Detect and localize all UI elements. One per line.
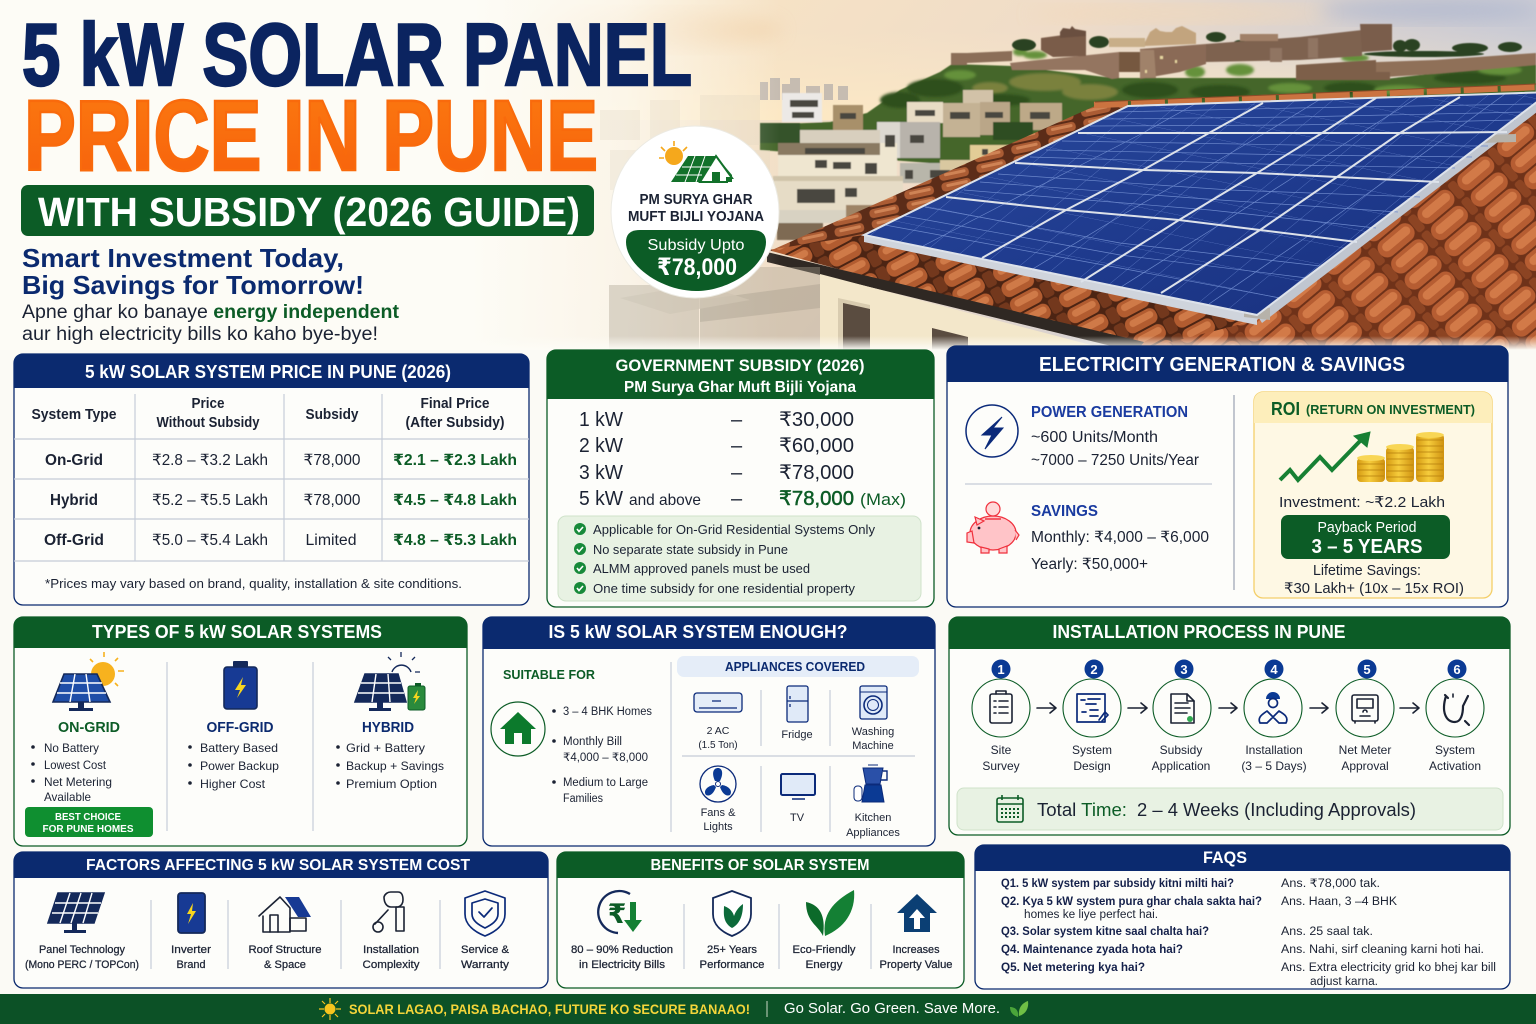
roof <box>774 106 1124 250</box>
heading: subsidy <box>616 356 864 396</box>
subsidy badge <box>611 126 779 298</box>
footer banner <box>0 994 1536 1024</box>
suitable for column: 3 – 4 BHK Homes <box>563 706 652 718</box>
lower walls <box>951 51 1012 65</box>
subsidy rates list: – <box>731 435 743 457</box>
benefit: performance: 25+ Years <box>707 944 757 956</box>
appliance: air conditioner <box>694 693 742 751</box>
panel: FAQs <box>975 845 1510 989</box>
table row: off-grid <box>44 532 517 549</box>
step 4: installation: 4 <box>1270 662 1278 677</box>
appliance: air conditioner: 2 AC <box>707 725 730 737</box>
step 1: site survey: 1 <box>997 662 1005 677</box>
heading: installation: INSTALLATION PROCESS IN PUNE <box>1052 622 1346 642</box>
heading: price table: 5 kW SOLAR SYSTEM PRICE IN PUNE (2026) <box>85 362 451 382</box>
benefit: bill reduction <box>571 891 673 971</box>
table row: on-grid: ₹2.1 – ₹2.3 Lakh <box>393 452 517 469</box>
best choice badge: FOR PUNE HOMES <box>42 823 134 835</box>
appliance: kitchen mixer: Kitchen <box>855 812 891 824</box>
ROI card: Lifetime Savings: <box>1313 563 1421 579</box>
total time bar: 2 – 4 Weeks (Including Approvals) <box>1137 800 1416 820</box>
table row: off-grid: Limited <box>306 532 356 549</box>
question 5: adjust karna. <box>1310 976 1378 988</box>
benefit: bill reduction: 80 – 90% Reduction <box>571 944 673 956</box>
subsidy rates list <box>579 409 906 510</box>
table header row: (After Subsidy) <box>406 415 505 431</box>
appliance: TV <box>781 774 815 824</box>
appliance: fan <box>700 766 736 833</box>
power generation text: ~7000 – 7250 Units/Year <box>1031 452 1199 469</box>
benefit: property value: Increases <box>892 944 940 956</box>
subsidy rates list: – <box>731 462 743 484</box>
question 1: Q1. 5 kW system par subsidy kitni milti hai? <box>1001 878 1234 890</box>
step 1: site survey: Site <box>991 743 1012 757</box>
icon: lightning bolt <box>966 405 1018 457</box>
arrow <box>1219 703 1237 713</box>
subsidy conditions box <box>558 516 921 601</box>
table row: hybrid <box>50 492 517 509</box>
step 4: installation: Installation <box>1245 743 1303 757</box>
factor: roof structure <box>248 897 322 971</box>
factor: service and warranty: Service & <box>461 944 510 956</box>
icon: sun <box>319 998 341 1020</box>
subsidy conditions box: No separate state subsidy in Pune <box>593 542 788 557</box>
heading: electricity: ELECTRICITY GENERATION & SAVINGS <box>1039 354 1405 376</box>
subsidy conditions box: ALMM approved panels must be used <box>593 561 810 576</box>
suitable for column: SUITABLE FOR <box>503 668 595 682</box>
icon: on-grid panel and sun <box>53 652 124 711</box>
table header row: Subsidy <box>306 407 358 423</box>
appliance: kitchen mixer <box>846 765 900 839</box>
table row: hybrid: ₹78,000 <box>304 492 361 509</box>
factor: inverter: Inverter <box>171 944 211 956</box>
step 3: subsidy application: Subsidy <box>1160 743 1202 757</box>
off-grid column: Higher Cost <box>200 777 266 791</box>
appliance: fridge <box>781 686 813 741</box>
total time bar <box>957 788 1503 830</box>
benefit: property value <box>880 894 952 971</box>
table row: on-grid: ₹2.8 – ₹3.2 Lakh <box>152 452 268 469</box>
power generation text: ~600 Units/Month <box>1031 429 1158 446</box>
factor: inverter <box>171 893 211 971</box>
question 5: Q5. Net metering kya hai? <box>1001 962 1145 974</box>
subsidy conditions box: One time subsidy for one residential property <box>593 581 856 596</box>
question 3: Q3. Solar system kitne saal chalta hai? <box>1001 926 1209 938</box>
question 3: Ans. 25 saal tak. <box>1281 926 1373 938</box>
panel: benefits <box>557 852 964 988</box>
arrow <box>1310 703 1328 713</box>
appliance: TV: TV <box>790 812 805 824</box>
subsidy rates list: (Max) <box>860 490 906 509</box>
subsidy badge: MUFT BIJLI YOJANA <box>628 208 764 225</box>
question 4 <box>1001 944 1484 956</box>
factor: service and warranty: Warranty <box>461 959 510 971</box>
step 2: system design: 2 <box>1090 662 1098 677</box>
off-grid column <box>188 720 279 791</box>
factor: roof structure: & Space <box>264 959 306 971</box>
subsidy rates list: 1 kW <box>579 409 623 431</box>
appliance: washing machine: Washing <box>852 726 894 738</box>
table row: on-grid: ₹78,000 <box>304 452 361 469</box>
icon: coin stacks <box>1357 432 1444 482</box>
table row: on-grid <box>45 452 517 469</box>
subsidy rates list: ₹60,000 <box>779 435 854 457</box>
footnote: *Prices may vary based on brand, quality, installation & site conditions. <box>45 577 462 591</box>
savings text: Yearly: ₹50,000+ <box>1031 556 1148 573</box>
question 4: Q4. Maintenance zyada hota hai? <box>1001 944 1183 956</box>
factor: roof structure: Roof Structure <box>248 944 322 956</box>
step 2: system design: System <box>1072 743 1112 757</box>
off-grid column: Power Backup <box>200 759 279 773</box>
title line 2: PRICE IN PUNE <box>24 80 598 192</box>
table row: hybrid: ₹5.2 – ₹5.5 Lakh <box>152 492 268 509</box>
best choice badge <box>25 807 153 837</box>
panel: factors affecting cost <box>14 852 548 988</box>
intro text <box>22 302 400 345</box>
tagline <box>22 243 364 300</box>
footer banner: SOLAR LAGAO, PAISA BACHAO, FUTURE KO SECURE BANAAO! <box>349 1002 750 1017</box>
heading: subsidy: GOVERNMENT SUBSIDY (2026) <box>616 356 864 375</box>
appliance: air conditioner: (1.5 Ton) <box>698 740 738 751</box>
subsidy rates list: and above <box>629 492 701 509</box>
payback badge: 3 – 5 YEARS <box>1312 536 1422 558</box>
benefit: performance <box>700 891 764 971</box>
intro text: aur high electricity bills ko kaho bye-bye! <box>22 324 378 345</box>
payback badge <box>1281 515 1450 559</box>
table row: off-grid: Off-Grid <box>44 532 104 549</box>
subsidy rates list: – <box>731 409 743 431</box>
arrow <box>1128 703 1147 713</box>
chart: growth arrow <box>1280 432 1370 480</box>
benefit: eco-friendly: Eco-Friendly <box>792 944 856 956</box>
step 6: system activation: 6 <box>1453 662 1461 677</box>
step 2: system design <box>1063 660 1121 773</box>
panel: electricity generation and savings <box>947 346 1508 607</box>
step 5: net meter: Net Meter <box>1339 743 1391 757</box>
factor: panel technology: (Mono PERC / TOPCon) <box>25 959 139 971</box>
ridge-side buildings <box>782 93 822 122</box>
table row: off-grid: ₹5.0 – ₹5.4 Lakh <box>152 532 268 549</box>
ROI card: Investment: ~₹2.2 Lakh <box>1279 494 1445 511</box>
power generation text <box>1031 404 1199 469</box>
appliances heading pill: APPLIANCES COVERED <box>725 660 865 674</box>
step 5: net meter: Approval <box>1341 759 1389 773</box>
icon: home <box>491 702 545 756</box>
off-grid column: Battery Based <box>200 741 278 755</box>
subsidy rates list: 3 kW <box>579 462 623 484</box>
appliance: washing machine: Machine <box>852 740 894 752</box>
on-grid column: Net Metering <box>44 775 112 789</box>
table header row: Without Subsidy <box>156 415 260 431</box>
question 4: Ans. Nahi, sirf cleaning karni hoti hai. <box>1281 944 1484 956</box>
subsidy badge: ₹78,000 <box>657 254 737 281</box>
hybrid column: Grid + Battery <box>346 741 425 755</box>
table row: on-grid: On-Grid <box>45 452 103 469</box>
heading: factors: FACTORS AFFECTING 5 kW SOLAR SYSTEM COST <box>86 857 471 874</box>
on-grid column: Lowest Cost <box>44 758 107 772</box>
table row: hybrid: ₹4.5 – ₹4.8 Lakh <box>393 492 517 509</box>
question 1: Ans. ₹78,000 tak. <box>1281 878 1380 890</box>
subsidy conditions box: Applicable for On-Grid Residential Systems Only <box>593 522 875 537</box>
appliances heading pill <box>677 656 919 677</box>
appliance: kitchen mixer: Appliances <box>846 827 900 839</box>
icon: leaf <box>1010 1001 1028 1017</box>
step 6: system activation <box>1426 660 1484 773</box>
question 5: Ans. Extra electricity grid ko bhej kar bill <box>1281 962 1496 974</box>
subsidy rates list: – <box>731 488 743 510</box>
panel: price table <box>14 354 529 605</box>
heading: benefits: BENEFITS OF SOLAR SYSTEM <box>650 857 870 874</box>
suitable for column: ₹4,000 – ₹8,000 <box>563 752 648 764</box>
question 2: homes ke liye perfect hai. <box>1024 909 1158 921</box>
step 4: installation: (3 – 5 Days) <box>1241 759 1307 773</box>
heading: FAQs: FAQS <box>1203 849 1247 867</box>
heading: subsidy: PM Surya Ghar Muft Bijli Yojana <box>624 379 856 396</box>
question 3 <box>1001 926 1373 938</box>
ROI heading: (RETURN ON INVESTMENT) <box>1306 402 1475 417</box>
subtitle banner: WITH SUBSIDY (2026 GUIDE) <box>38 189 580 235</box>
ROI card: ₹30 Lakh+ (10x – 15x ROI) <box>1284 581 1464 597</box>
heading: types: TYPES OF 5 kW SOLAR SYSTEMS <box>92 622 382 642</box>
question 2: Q2. Kya 5 kW system pura ghar chala sakta hai? <box>1001 896 1262 908</box>
panel: installation process <box>949 617 1510 835</box>
panel: is 5 kW enough <box>483 617 935 846</box>
question 2 <box>1001 896 1397 921</box>
question 1 <box>1001 878 1380 890</box>
benefit: bill reduction: in Electricity Bills <box>579 959 666 971</box>
appliance: fridge: Fridge <box>781 729 813 741</box>
factor: inverter: Brand <box>176 959 206 971</box>
on-grid column: ON-GRID <box>58 720 120 736</box>
step 1: site survey: Survey <box>982 759 1020 773</box>
left fade and faded foreground buildings <box>0 0 780 350</box>
savings text: SAVINGS <box>1031 503 1098 520</box>
subsidy badge: Subsidy Upto <box>648 237 745 254</box>
ROI heading: ROI <box>1271 399 1300 419</box>
table header row: Price <box>192 396 224 412</box>
icon: piggy bank <box>967 502 1019 553</box>
savings text: Monthly: ₹4,000 – ₹6,000 <box>1031 529 1209 546</box>
factor: service and warranty <box>461 891 510 971</box>
subsidy rates list: ₹78,000 <box>779 462 854 484</box>
table header row: System Type <box>32 407 116 423</box>
appliance: washing machine <box>852 686 894 752</box>
step 3: subsidy application: Application <box>1152 759 1210 773</box>
off-grid column: OFF-GRID <box>206 720 274 736</box>
question 2: Ans. Haan, 3 –4 BHK <box>1281 896 1397 908</box>
subsidy rates list: ₹78,000 <box>779 488 854 510</box>
suitable for column: Families <box>563 793 603 805</box>
on-grid column: Available <box>44 790 91 804</box>
on-grid column <box>31 720 120 804</box>
benefit: property value: Property Value <box>880 959 952 971</box>
step 5: net meter: 5 <box>1363 662 1371 677</box>
on-grid column: No Battery <box>44 741 99 755</box>
arrow <box>1037 703 1056 713</box>
benefit: eco-friendly <box>792 890 856 971</box>
step 2: system design: Design <box>1073 759 1111 773</box>
icon: battery <box>224 661 257 709</box>
ROI card <box>1254 392 1492 598</box>
suitable for column: Monthly Bill <box>563 736 622 748</box>
step 4: installation <box>1241 660 1307 773</box>
subsidy badge: PM SURYA GHAR <box>640 191 753 208</box>
ROI heading <box>1271 399 1475 419</box>
step 1: site survey <box>972 660 1030 773</box>
hybrid column: Backup + Savings <box>346 759 444 773</box>
benefit: bill reduction: ₹ <box>608 899 626 929</box>
step 5: net meter <box>1336 660 1394 773</box>
power generation text: POWER GENERATION <box>1031 404 1188 421</box>
icon: calendar <box>997 795 1023 822</box>
table row: hybrid: Hybrid <box>50 492 98 509</box>
hero photo: hillside fort, city and rooftop solar array <box>547 0 1536 350</box>
step 6: system activation: Activation <box>1429 759 1481 773</box>
subsidy rates list: 2 kW <box>579 435 623 457</box>
hybrid column <box>336 720 444 791</box>
hybrid column: Premium Option <box>346 777 437 791</box>
intro text: Apne ghar ko banaye energy independent <box>22 302 400 323</box>
best choice badge: BEST CHOICE <box>55 811 121 823</box>
savings text <box>1031 503 1209 573</box>
appliance: fan: Lights <box>703 821 733 833</box>
question 5 <box>1001 962 1496 988</box>
tagline: Big Savings for Tomorrow! <box>22 270 364 300</box>
subsidy rates list: ₹30,000 <box>779 409 854 431</box>
icon: hybrid panel, sun and battery <box>355 652 425 711</box>
factor: panel technology: Panel Technology <box>39 944 125 956</box>
arrow <box>1400 703 1419 713</box>
icon: sun and solar house <box>659 141 732 182</box>
subsidy rates list: 5 kW <box>579 488 623 510</box>
upper fort <box>1041 32 1086 57</box>
panel: types of systems <box>14 617 467 846</box>
heading: is 5 kW enough: IS 5 kW SOLAR SYSTEM ENOUGH? <box>548 622 848 642</box>
hybrid column: HYBRID <box>362 720 414 736</box>
table row: off-grid: ₹4.8 – ₹5.3 Lakh <box>393 532 517 549</box>
table header row: Final Price <box>420 396 490 412</box>
step 6: system activation: System <box>1435 743 1475 757</box>
factor: panel technology <box>25 893 139 971</box>
factor: installation complexity: Complexity <box>362 959 420 971</box>
panel: government subsidy <box>547 350 934 607</box>
factor: installation complexity: Installation <box>363 944 419 956</box>
title line 1: 5 kW SOLAR PANEL <box>22 5 692 104</box>
appliance: fan: Fans & <box>701 807 736 819</box>
total time bar: Total Time: <box>1037 800 1127 820</box>
tagline: Smart Investment Today, <box>22 243 344 273</box>
benefit: eco-friendly: Energy <box>806 959 843 971</box>
step 3: subsidy application <box>1152 660 1211 773</box>
payback badge: Payback Period <box>1318 520 1416 536</box>
step 3: subsidy application: 3 <box>1180 662 1188 677</box>
suitable for column <box>491 668 652 805</box>
factor: installation complexity <box>362 892 420 971</box>
suitable for column: Medium to Large <box>563 777 648 789</box>
footer banner: Go Solar. Go Green. Save More. <box>784 1001 1000 1017</box>
benefit: performance: Performance <box>700 959 764 971</box>
table header row <box>32 396 505 431</box>
